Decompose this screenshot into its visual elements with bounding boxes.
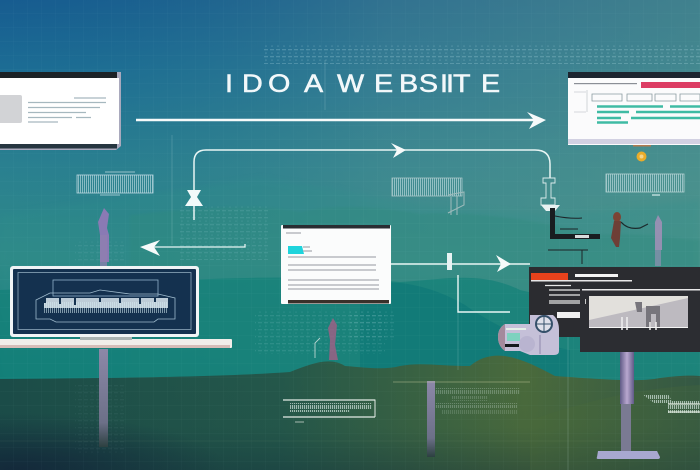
icon: camera gadget	[498, 315, 559, 355]
background: ground	[0, 356, 700, 470]
post: centre bottom with figure	[315, 318, 338, 360]
text lines	[545, 286, 585, 303]
panel: top left browser window	[0, 72, 121, 150]
background: layered mountains	[0, 178, 700, 380]
arrow: long top arrow	[136, 112, 546, 129]
data label: right	[606, 174, 684, 195]
laptop base	[0, 339, 232, 348]
image placeholder	[0, 95, 22, 123]
panel: laptop with blueprint	[0, 266, 232, 348]
blueprint drawing	[36, 280, 175, 322]
arrow: centre-right arrow	[391, 253, 530, 312]
data label: lower right	[642, 394, 700, 413]
data label: lower left	[283, 400, 375, 422]
data label: centre	[392, 178, 464, 215]
monitor stand	[620, 352, 634, 404]
red header bar	[641, 82, 700, 88]
icon: figure	[611, 212, 648, 247]
title: I DOA WEBSIITE	[225, 70, 500, 98]
teal rows	[597, 106, 700, 122]
post: left with knot	[98, 208, 109, 447]
panel: top right browser window	[568, 72, 700, 145]
post: right with knot	[655, 215, 662, 266]
icon: dark bracket machine	[541, 178, 600, 264]
icon: orange bulb	[633, 145, 651, 162]
arrow: left arrow	[140, 240, 245, 256]
data label: lower centre	[393, 382, 530, 414]
data label: left	[77, 172, 153, 195]
icon: bowtie valve	[185, 190, 203, 206]
panel: dark article screen	[529, 267, 700, 337]
orange tab	[531, 273, 568, 280]
text lines	[28, 98, 106, 122]
screen image	[589, 296, 688, 331]
panel: front monitor with stand	[580, 289, 700, 459]
panel: centre document window	[281, 225, 391, 304]
cyan image	[288, 246, 304, 254]
arrow: rounded connector path with arrowhead	[194, 143, 550, 220]
text lines	[286, 233, 379, 289]
post: lower centre	[427, 381, 435, 457]
table cells	[592, 94, 700, 101]
